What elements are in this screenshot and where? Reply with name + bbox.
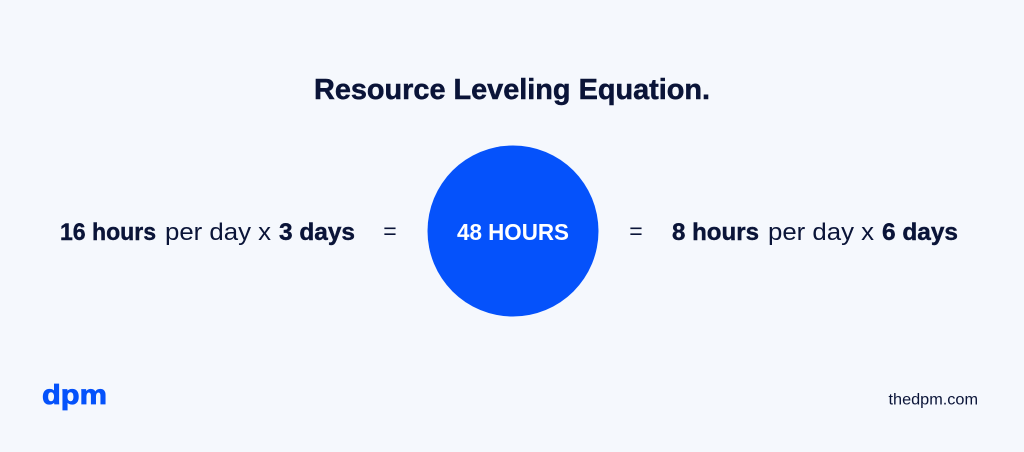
website url: thedpm.com (888, 392, 978, 408)
central circle: 48 hours (428, 146, 598, 316)
left equals sign: = (383, 218, 397, 244)
left equation: 16 hours per day x 3 days: 3 days (279, 219, 355, 246)
left equation: 16 hours per day x 3 days: 16 hours (60, 219, 156, 246)
right equals sign: = (629, 218, 643, 244)
left equation: 16 hours per day x 3 days: per day x (165, 219, 271, 246)
right equation: 8 hours per day x 6 days: 8 hours (672, 219, 759, 246)
central circle: 48 hours: 48 HOURS (457, 219, 569, 245)
right equation: 8 hours per day x 6 days (672, 219, 958, 246)
right equation: 8 hours per day x 6 days: 6 days (882, 219, 958, 246)
title: Resource Leveling Equation. (314, 74, 710, 106)
right equation: 8 hours per day x 6 days: per day x (768, 219, 874, 246)
dpm logo: dpm (42, 379, 107, 410)
left equation: 16 hours per day x 3 days (60, 219, 355, 246)
